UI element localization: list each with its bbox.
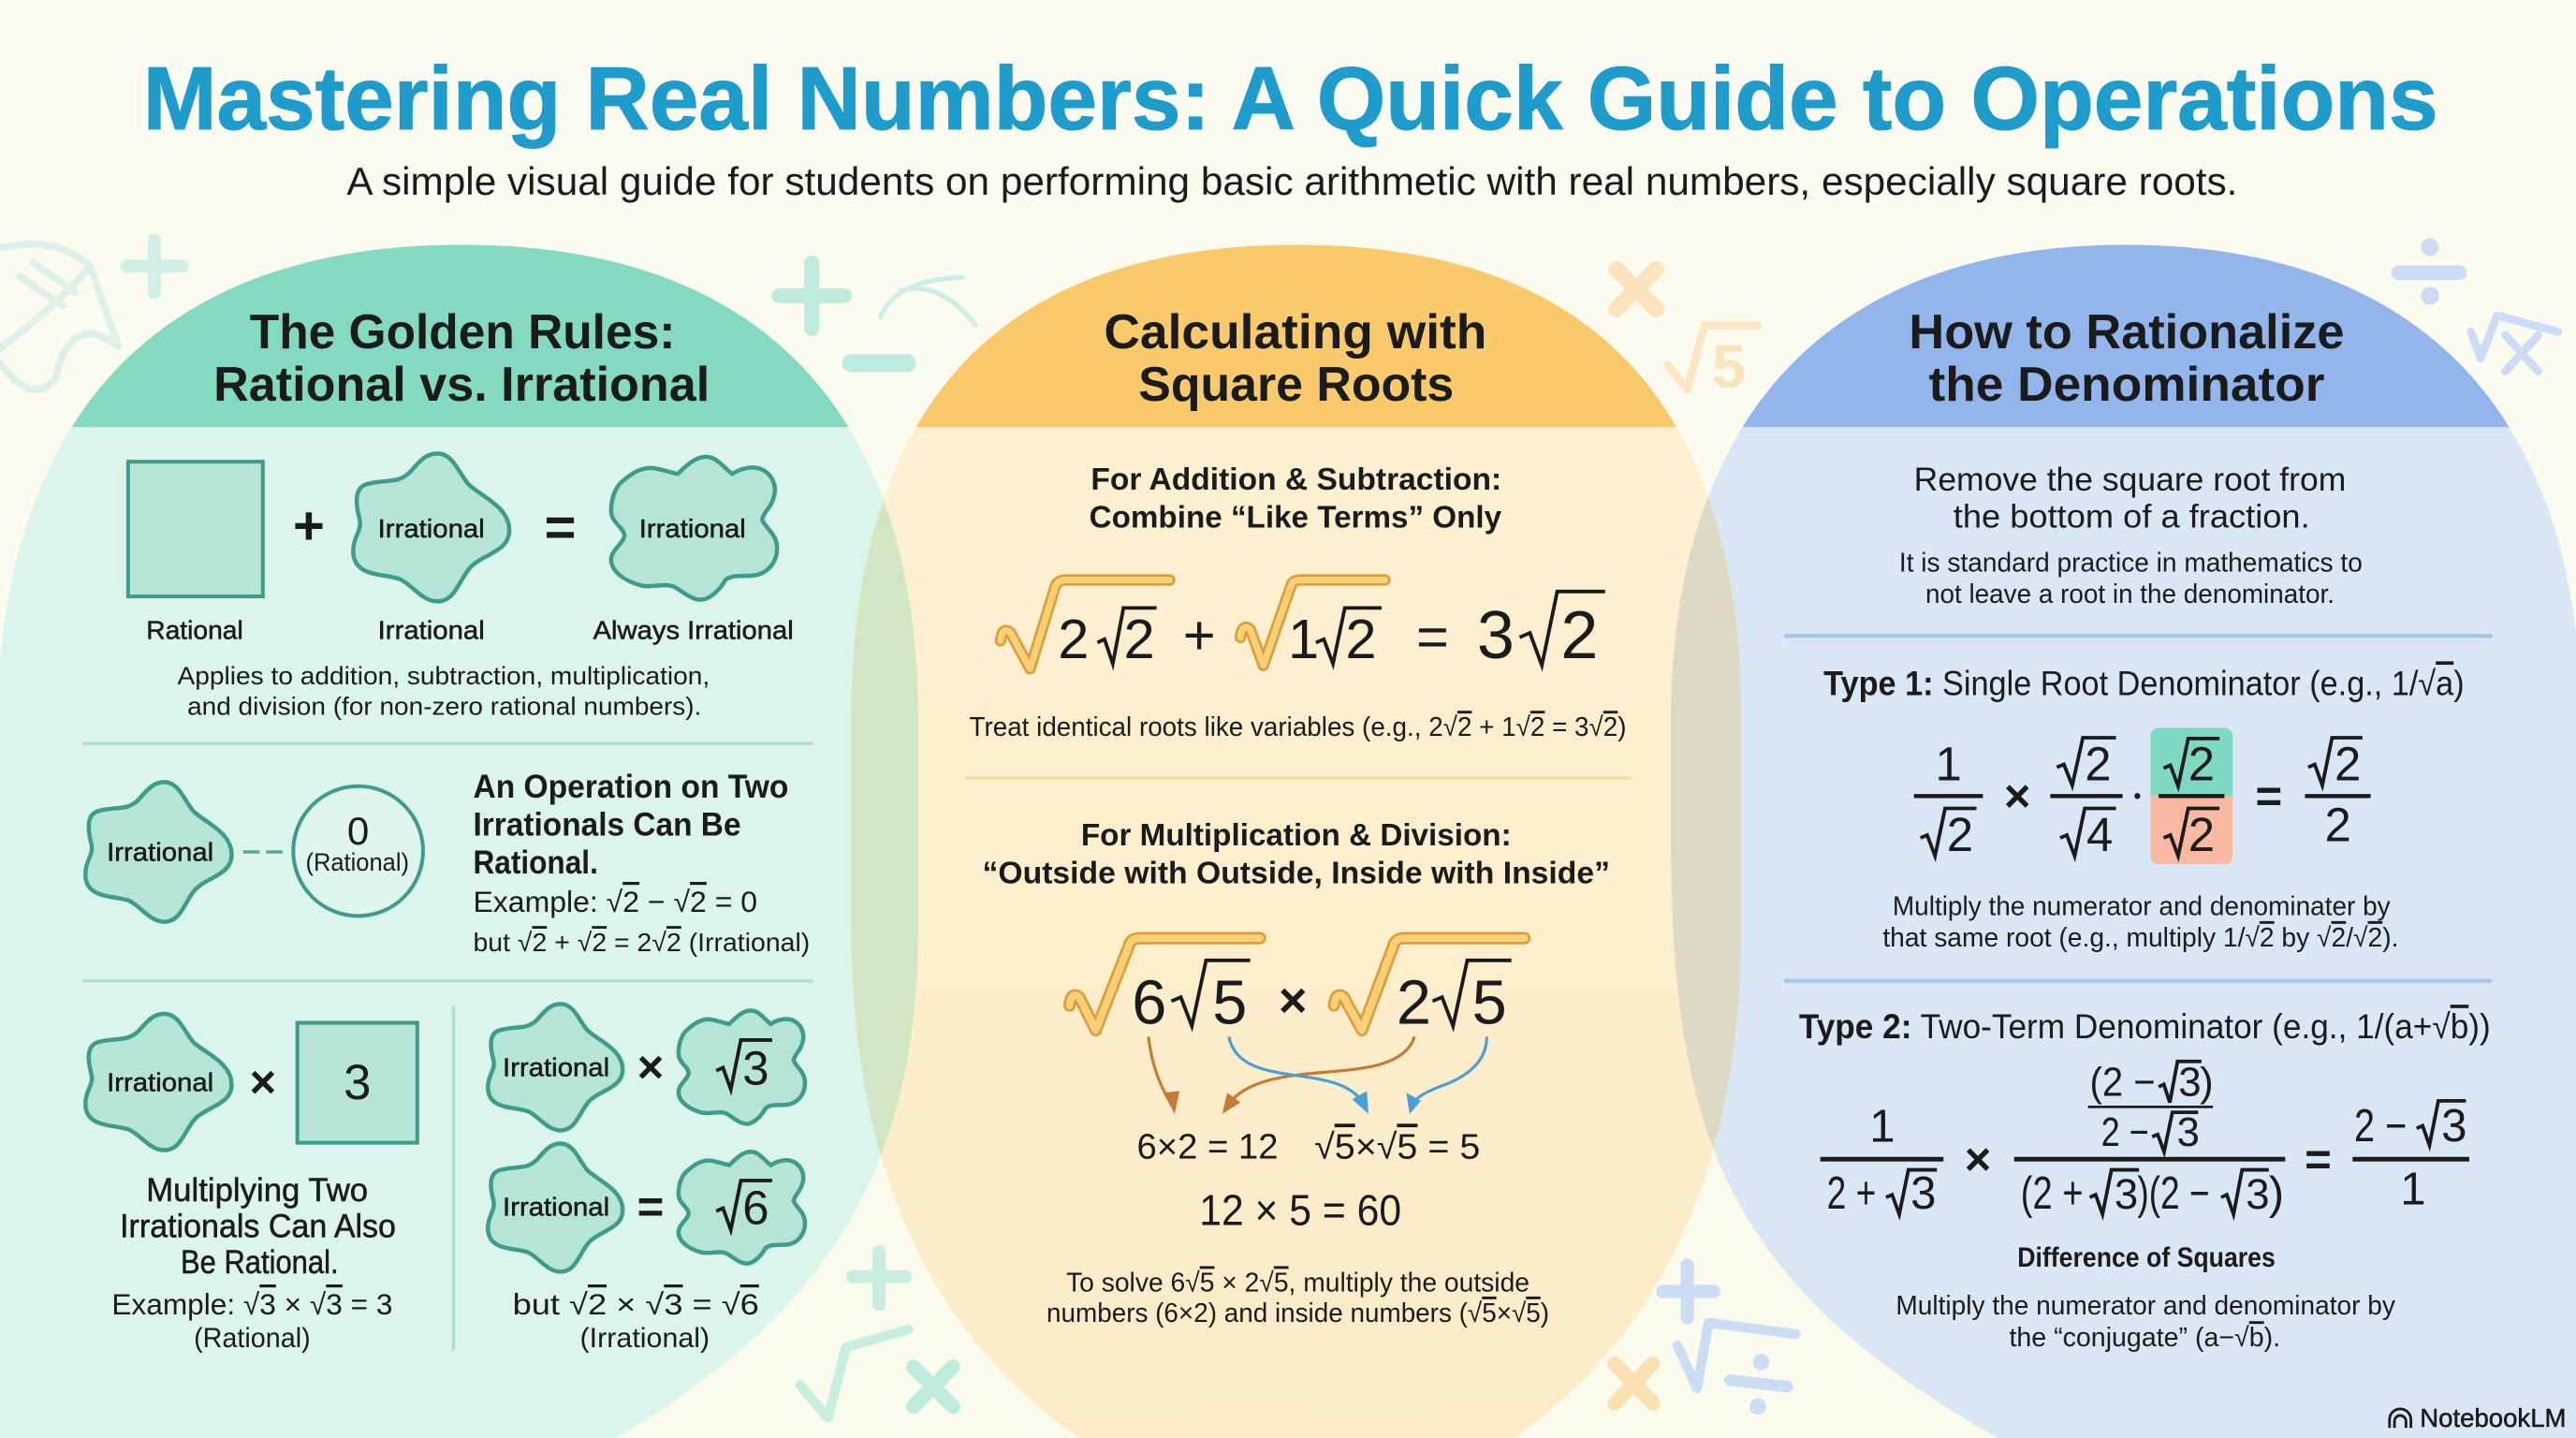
text: multiplying two irrationals: Multiplying Two [146, 1172, 368, 1209]
equation: type 2: (2 − [2089, 1060, 2156, 1106]
equation: multiplication of roots: 2 [1397, 968, 1431, 1037]
heading: rationalize [1909, 304, 2345, 411]
equation: type 1: 2 [2085, 738, 2112, 791]
text: operation on two irrationals: but √2 + √2 = 2√2 (Irrational) [473, 928, 810, 957]
equation: multiplication of roots [1070, 938, 1525, 1037]
equation: type 1: 2 [2334, 738, 2361, 791]
equation: multiplication of roots: 6 [1132, 968, 1166, 1037]
note: type 2 method [1895, 1291, 2395, 1353]
equation: type 1: 2 [2324, 799, 2351, 852]
rule diagram: rational plus irrational: Irrational [639, 514, 746, 543]
diagram: irrational products: Irrational [503, 1053, 609, 1082]
panel: rationalize the denominator [1784, 304, 2492, 1353]
note: applies to: and division (for non-zero rational numbers). [187, 691, 701, 720]
text: irrational product example: but √ 2 × √ 3 = √ 6 [513, 1287, 759, 1321]
note: type 2 method: the “conjugate” (a−√b). [2009, 1323, 2280, 1353]
note: type 1 method: Multiply the numerator and denominater by [1893, 892, 2391, 922]
equation: addition of like roots: 2 [1560, 598, 1598, 673]
diagram: irrational times three: 3 [344, 1055, 371, 1110]
rule diagram: rational plus irrational: = [545, 498, 576, 558]
rule diagram: rational plus irrational: Irrational [378, 514, 485, 543]
heading: rationalize: the Denominator [1928, 357, 2324, 411]
diagram: irrational to zero: 0 [347, 809, 369, 853]
diagram: irrational to zero: Irrational [107, 838, 213, 867]
equation: type 1: 4 [2086, 808, 2113, 861]
background math doodles: 5 [1712, 332, 1746, 401]
heading: golden rules: The Golden Rules: [250, 304, 675, 359]
intermediate results [1137, 1126, 1480, 1166]
equation: multiplication of roots: 5 [1212, 968, 1247, 1037]
text: operation on two irrationals: Rational. [473, 844, 598, 881]
subtitle: A simple visual guide for students on performing basic arithmetic with real numbers, especially square roots. [346, 159, 2237, 203]
intermediate results: √5×√5 = 5 [1314, 1126, 1480, 1166]
equation: type 2: ) [2200, 1060, 2214, 1106]
diagram: irrational to zero [85, 782, 423, 922]
equation: type 2: 3 [2177, 1109, 2200, 1155]
note: applies to: Applies to addition, subtraction, multiplication, [178, 661, 710, 690]
equation: type 1: × [2004, 771, 2031, 822]
equation: type 2: 1 [2400, 1164, 2426, 1214]
subheading: multiplication and division [983, 818, 1610, 890]
equation: type 2: ) [2269, 1168, 2284, 1219]
text: multiplying two irrationals: Be Rational. [181, 1244, 339, 1281]
panel: calculating with square roots [964, 304, 1632, 1328]
equation: type 2: 1 [1869, 1102, 1895, 1152]
text: multiplying two irrationals: Irrationals Can Also [120, 1209, 396, 1245]
note: treat identical roots: Treat identical roots like variables (e.g., 2√2 + 1√2 = 3√2) [970, 712, 1627, 742]
text: multiplying two irrationals: Example: √3 × √3 = 3 [111, 1287, 392, 1321]
heading: type 2: Type 2: Two-Term Denominator (e.g., 1/(a+√b)) [1799, 1007, 2491, 1046]
diagram: irrational products [488, 1004, 805, 1271]
equation: type 1: = [2255, 771, 2282, 822]
equation: type 2: = [2305, 1135, 2332, 1185]
note: applies to [178, 661, 710, 720]
equation: type 2: 3 [2115, 1170, 2138, 1218]
heading: golden rules: Rational vs. Irrational [213, 357, 710, 411]
text: operation on two irrationals: Example: √2 − √2 = 0 [473, 885, 757, 918]
note: type 1 method: that same root (e.g., multiply 1/√2 by √2/√2). [1882, 923, 2398, 953]
heading: square roots: Calculating with [1104, 304, 1486, 359]
rule diagram: rational plus irrational: Always Irrational [593, 616, 794, 645]
intro text: It is standard practice in mathematics to [1899, 549, 2363, 579]
text: multiplying two irrationals: (Rational) [194, 1323, 311, 1354]
heading: square roots [1104, 304, 1486, 411]
diagram: irrational products: Irrational [503, 1193, 609, 1222]
note: type 1 method [1882, 892, 2398, 953]
equation: type 2: 3 [2178, 1060, 2202, 1106]
final result: 12 × 5 = 60 [1199, 1185, 1401, 1234]
equation: type 1: 2 [2188, 808, 2215, 861]
text: irrational product example [513, 1287, 759, 1354]
diagram: irrational times three [85, 1014, 417, 1151]
equation: type 2: 2 + [1827, 1168, 1876, 1219]
subheading: multiplication and division: For Multiplication & Division: [1081, 818, 1512, 853]
note: how to solve [1046, 1268, 1549, 1328]
note: how to solve: numbers (6×2) and inside numbers (√5×√5) [1046, 1299, 1549, 1328]
equation: addition of like roots: 1 [1288, 608, 1319, 670]
diagram: irrational products: 6 [742, 1181, 769, 1234]
text: operation on two irrationals: Irrationals Can Be [473, 806, 741, 843]
notebooklm logo: NotebookLM [2420, 1403, 2566, 1432]
rule diagram: rational plus irrational: Irrational [378, 616, 485, 645]
heading: rationalize: How to Rationalize [1909, 304, 2345, 359]
rule diagram: rational plus irrational: + [293, 496, 325, 556]
text: operation on two irrationals: An Operation on Two [473, 769, 788, 805]
label: difference of squares: Difference of Squares [2017, 1242, 2276, 1273]
diagram: irrational products: × [637, 1043, 664, 1093]
equation: type 1: 2 [2188, 738, 2215, 791]
note: how to solve: To solve 6√5 × 2√5, multiply the outside [1066, 1268, 1530, 1298]
intro text [1899, 462, 2363, 609]
equation: type 1: 2 [1947, 808, 1973, 861]
equation: addition of like roots: 2 [1123, 608, 1155, 670]
diagram: irrational to zero: (Rational) [305, 847, 409, 876]
heading: type 1: Type 1: Single Root Denominator (e.g., 1/√a) [1823, 664, 2465, 702]
text: multiplying two irrationals [111, 1172, 396, 1354]
note: type 2 method: Multiply the numerator and denominator by [1895, 1291, 2395, 1321]
heading: golden rules [213, 304, 710, 411]
subheading: addition and subtraction [1090, 462, 1502, 535]
equation: multiplication of roots: × [1279, 973, 1308, 1028]
rule diagram: rational plus irrational [128, 453, 794, 645]
diagram: irrational products: 3 [742, 1041, 769, 1094]
subheading: addition and subtraction: Combine “Like Terms” Only [1090, 500, 1502, 535]
equation: type 2: 2 − [2354, 1101, 2407, 1152]
diagram: irrational times three: Irrational [107, 1067, 213, 1096]
equation: type 1: 1 [1936, 738, 1962, 791]
arrows: outside and inside pairing [1149, 1036, 1486, 1114]
intro text: Remove the square root from [1914, 462, 2346, 498]
equation: type 1 [1914, 727, 2371, 864]
heading: square roots: Square Roots [1138, 357, 1454, 411]
text: irrational product example: (Irrational) [580, 1323, 710, 1354]
text: operation on two irrationals [473, 769, 810, 957]
subheading: multiplication and division: “Outside with Outside, Inside with Inside” [983, 856, 1610, 890]
rule diagram: rational plus irrational: Rational [146, 616, 243, 645]
equation: addition of like roots: + [1183, 604, 1216, 667]
panel: golden rules [82, 304, 813, 1354]
equation: addition of like roots: = [1416, 605, 1449, 668]
diagram: irrational products: = [637, 1182, 664, 1233]
title: Mastering Real Numbers: A Quick Guide to Operations [143, 49, 2438, 149]
intro text: not leave a root in the denominator. [1925, 580, 2334, 609]
equation: addition of like roots: 2 [1058, 608, 1089, 670]
equation: type 2: 3 [2441, 1101, 2466, 1152]
diagram: irrational times three: × [249, 1057, 276, 1108]
intermediate results: 6×2 = 12 [1137, 1126, 1278, 1166]
equation: type 2: 2 − [2101, 1109, 2149, 1155]
equation: type 2 [1821, 1060, 2469, 1219]
intro text: the bottom of a fraction. [1954, 498, 2310, 535]
equation: type 2: 3 [1910, 1168, 1937, 1219]
equation: addition of like roots: 2 [1345, 608, 1377, 670]
equation: addition of like roots [1001, 580, 1605, 673]
equation: type 2: )(2 − [2137, 1168, 2210, 1219]
subheading: addition and subtraction: For Addition & Subtraction: [1090, 462, 1501, 497]
equation: type 2: 3 [2246, 1170, 2270, 1218]
equation: type 2: (2 + [2021, 1168, 2083, 1219]
equation: multiplication of roots: 5 [1472, 968, 1507, 1037]
equation: addition of like roots: 3 [1477, 598, 1515, 673]
equation: type 2: × [1965, 1135, 1991, 1185]
